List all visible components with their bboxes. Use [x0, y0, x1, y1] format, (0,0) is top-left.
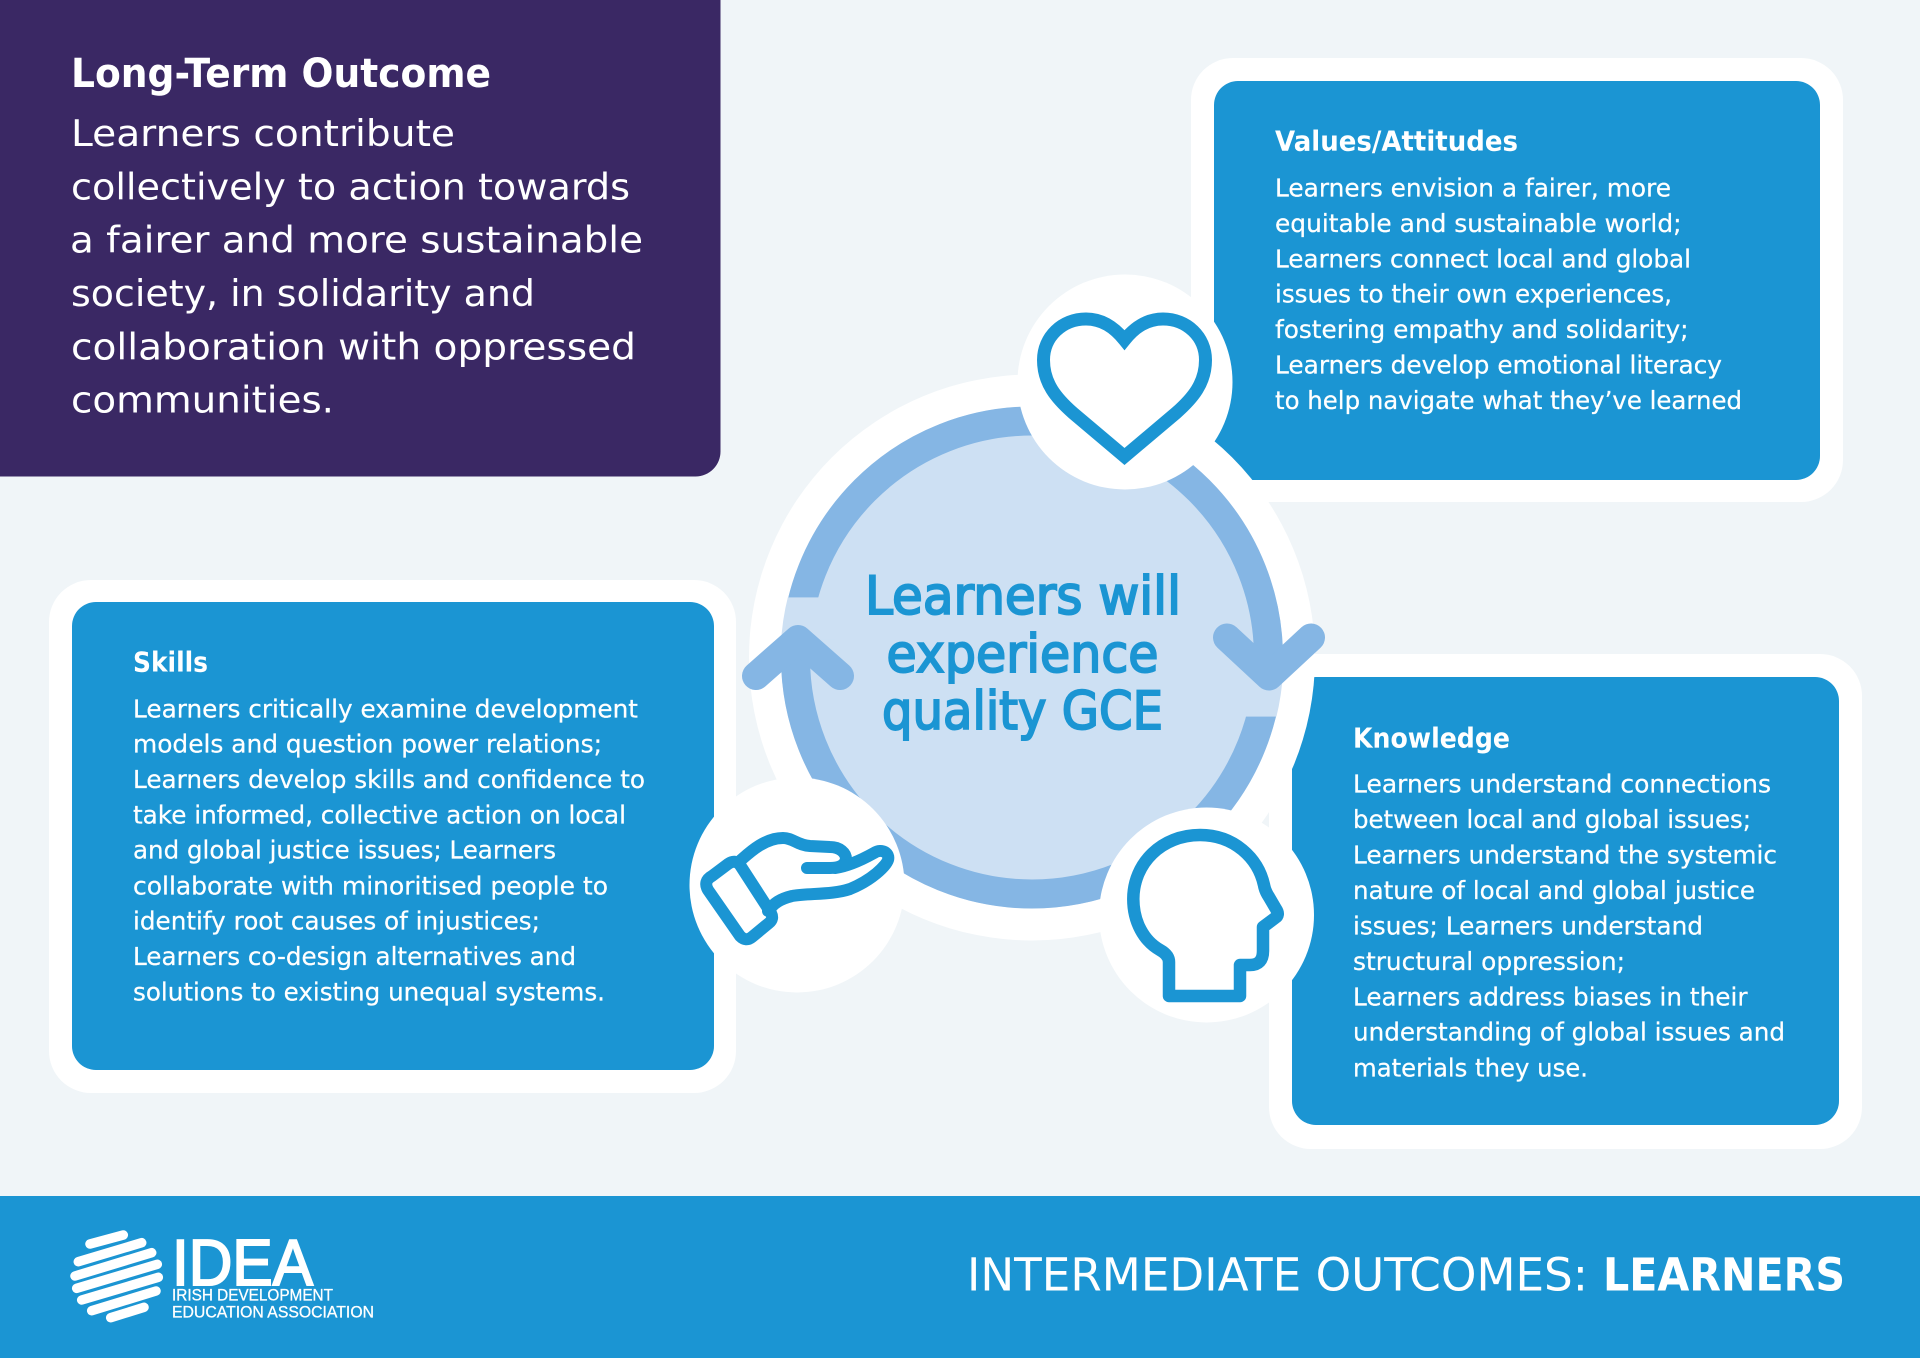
arrow: right, pointing down: [1227, 638, 1311, 676]
text block: skills outcomes: Learners critically examine development: [133, 694, 638, 723]
panel: long-term outcome: [0, 0, 721, 476]
logo: IDEA: IRISH DEVELOPMENT: [172, 1287, 333, 1305]
text block: knowledge outcomes: Learners understand the systemic: [1353, 840, 1777, 869]
text block: knowledge outcomes: structural oppression;: [1353, 947, 1625, 976]
logo: IDEA: IDEA: [172, 1226, 314, 1299]
text block: knowledge outcomes: Learners understand connections: [1353, 770, 1771, 799]
heading: long-term outcome: Long-Term Outcome: [71, 51, 491, 97]
text block: long-term outcome description: a fairer and more sustainable: [70, 219, 643, 262]
text block: knowledge outcomes: issues; Learners understand: [1353, 911, 1703, 940]
footer title: LEARNERS: [1603, 1249, 1845, 1302]
text block: skills outcomes: take informed, collective action on local: [133, 800, 626, 829]
text block: knowledge outcomes: materials they use.: [1353, 1053, 1588, 1082]
diagram: learning cycle: [690, 274, 1315, 1022]
text block: long-term outcome description: society, in solidarity and: [71, 272, 535, 315]
text block: values/attitudes outcomes: to help navigate what they’ve learned: [1275, 386, 1742, 415]
text block: skills outcomes: and global justice issues; Learners: [133, 836, 556, 865]
text block: values/attitudes outcomes: equitable and sustainable world;: [1275, 209, 1682, 238]
text block: long-term outcome description: Learners contribute: [71, 112, 455, 155]
text block: knowledge outcomes: between local and global issues;: [1353, 805, 1751, 834]
text block: skills outcomes: [133, 694, 645, 1007]
footer title: INTERMEDIATE OUTCOMES:: [967, 1249, 1588, 1302]
text block: long-term outcome description: collaboration with oppressed: [71, 325, 636, 368]
text block: values/attitudes outcomes: Learners envision a fairer, more: [1275, 174, 1671, 203]
text block: skills outcomes: Learners co-design alternatives and: [133, 942, 576, 971]
icon: head: [1099, 808, 1314, 1022]
panel: skills: [49, 580, 736, 1093]
text block: values/attitudes outcomes: fostering empathy and solidarity;: [1275, 315, 1688, 344]
heading: skills: Skills: [133, 647, 208, 679]
panel: values/attitudes: [1191, 58, 1843, 502]
text block: values/attitudes outcomes: [1275, 174, 1742, 415]
text block: knowledge outcomes: understanding of global issues and: [1353, 1018, 1785, 1047]
text block: values/attitudes outcomes: Learners develop emotional literacy: [1275, 350, 1722, 379]
heading: values/attitudes: Values/Attitudes: [1275, 126, 1518, 158]
text block: skills outcomes: models and question power relations;: [133, 730, 602, 759]
text block: knowledge outcomes: nature of local and global justice: [1353, 876, 1755, 905]
text block: values/attitudes outcomes: Learners connect local and global: [1275, 244, 1691, 273]
text block: skills outcomes: solutions to existing unequal systems.: [133, 978, 605, 1007]
heading: knowledge: Knowledge: [1353, 722, 1510, 754]
text block: long-term outcome description: collectively to action towards: [71, 165, 630, 208]
icon: heart: [1018, 274, 1232, 490]
text block: knowledge outcomes: Learners address biases in their: [1353, 982, 1748, 1011]
central text: [865, 566, 1181, 742]
icon: open hand: [690, 778, 904, 992]
text block: skills outcomes: collaborate with minoritised people to: [133, 871, 608, 900]
text block: long-term outcome description: [70, 112, 643, 422]
text block: knowledge outcomes: [1353, 770, 1785, 1082]
central text: Learners will: [865, 566, 1181, 627]
text block: long-term outcome description: communities.: [71, 379, 334, 422]
logo: IDEA: [75, 1226, 374, 1321]
panel: knowledge: [1269, 654, 1862, 1149]
logo: IDEA: EDUCATION ASSOCIATION: [172, 1303, 374, 1321]
text block: skills outcomes: Learners develop skills and confidence to: [133, 765, 645, 794]
footer band: [0, 1196, 1920, 1358]
icon: striped globe: [75, 1235, 158, 1318]
central text: experience: [886, 624, 1158, 685]
central text: quality GCE: [882, 681, 1163, 742]
text block: values/attitudes outcomes: issues to their own experiences,: [1275, 280, 1672, 309]
text block: skills outcomes: identify root causes of injustices;: [133, 907, 540, 936]
arrow: left, pointing up: [756, 639, 840, 676]
